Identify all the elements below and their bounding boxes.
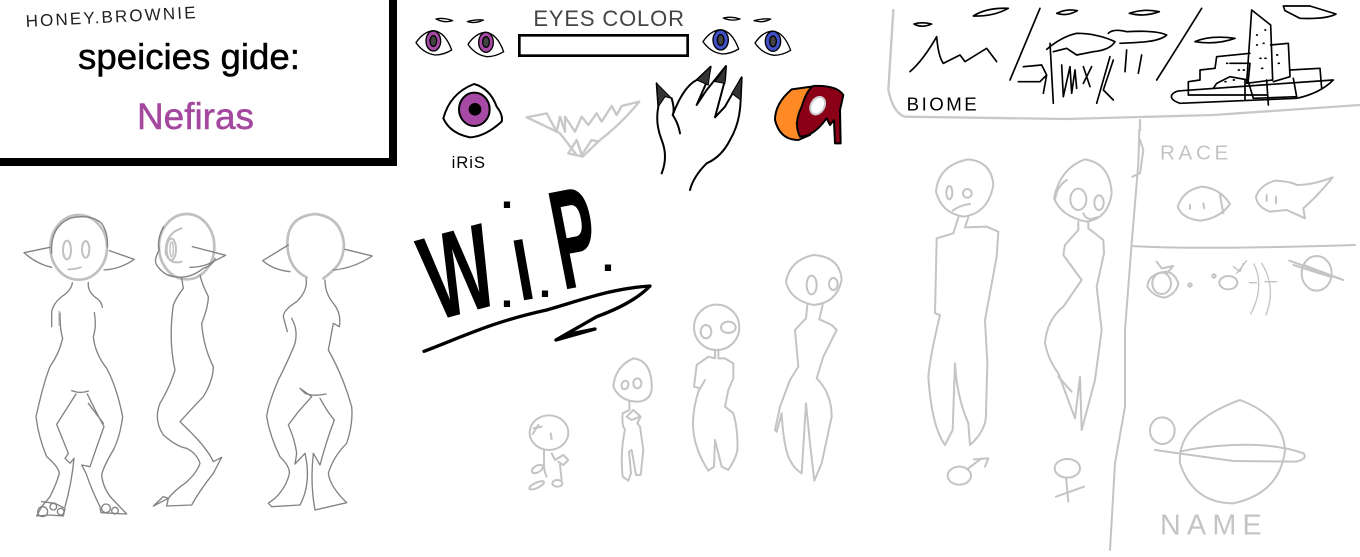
icon: iris diagram <box>443 84 502 137</box>
biome: mountains <box>910 8 1008 72</box>
icon: male symbol <box>948 458 988 485</box>
panel: anatomy details <box>443 66 843 190</box>
label: biome: BIOME <box>907 94 977 115</box>
panel: biomes <box>888 6 1360 130</box>
author credit: HONEY.BROWNIE <box>25 3 196 31</box>
world icons <box>1147 256 1343 315</box>
panel: eye colours <box>416 6 791 57</box>
panel: sexes and world notes <box>928 130 1355 550</box>
icon: clawed hand <box>657 66 742 190</box>
figure: female <box>1045 159 1112 430</box>
blue eye pair <box>703 17 791 55</box>
icon: female symbol <box>1055 459 1084 502</box>
figure: child <box>613 358 652 481</box>
biome: forest <box>1010 8 1167 103</box>
panel: life stages <box>528 255 842 491</box>
frame line <box>888 10 1360 130</box>
heading: W.I.P.: I <box>506 220 540 320</box>
heading: speicies gide: <box>78 36 300 77</box>
figure: back view <box>263 214 372 510</box>
panel: character turnaround <box>24 214 372 517</box>
label: name: NAME <box>1160 510 1262 542</box>
figure: adolescent <box>693 305 739 471</box>
icon: bleeding eye <box>775 86 843 143</box>
figure: male <box>928 159 998 445</box>
underline flourish <box>424 286 650 351</box>
heading: W.I.P.: . <box>501 169 513 218</box>
heading: W.I.P.: . <box>539 258 551 307</box>
label: eyes color: EYES COLOR <box>533 6 684 31</box>
biome: city <box>1157 6 1336 105</box>
icon: teeth <box>527 102 639 157</box>
label: race: RACE <box>1160 141 1228 164</box>
figure: side view <box>153 214 226 506</box>
purple eye pair <box>416 18 504 57</box>
panel: title box <box>0 0 397 166</box>
heading: W.I.P.: P <box>539 157 611 320</box>
figure: adult <box>775 255 842 481</box>
species name: Nefiras <box>137 96 254 137</box>
label: iris: iRiS <box>452 153 485 172</box>
colour bar <box>519 35 688 56</box>
figure: infant <box>528 415 568 491</box>
race icons <box>1178 177 1333 221</box>
divider lines <box>1110 130 1355 550</box>
heading: W.I.P.: W <box>407 199 510 347</box>
figure: front view <box>24 215 134 517</box>
heading: W.I.P. <box>407 157 614 347</box>
heading: W.I.P.: . <box>602 232 614 281</box>
heading: W.I.P.: . <box>501 268 513 317</box>
planet name icon <box>1150 400 1305 503</box>
